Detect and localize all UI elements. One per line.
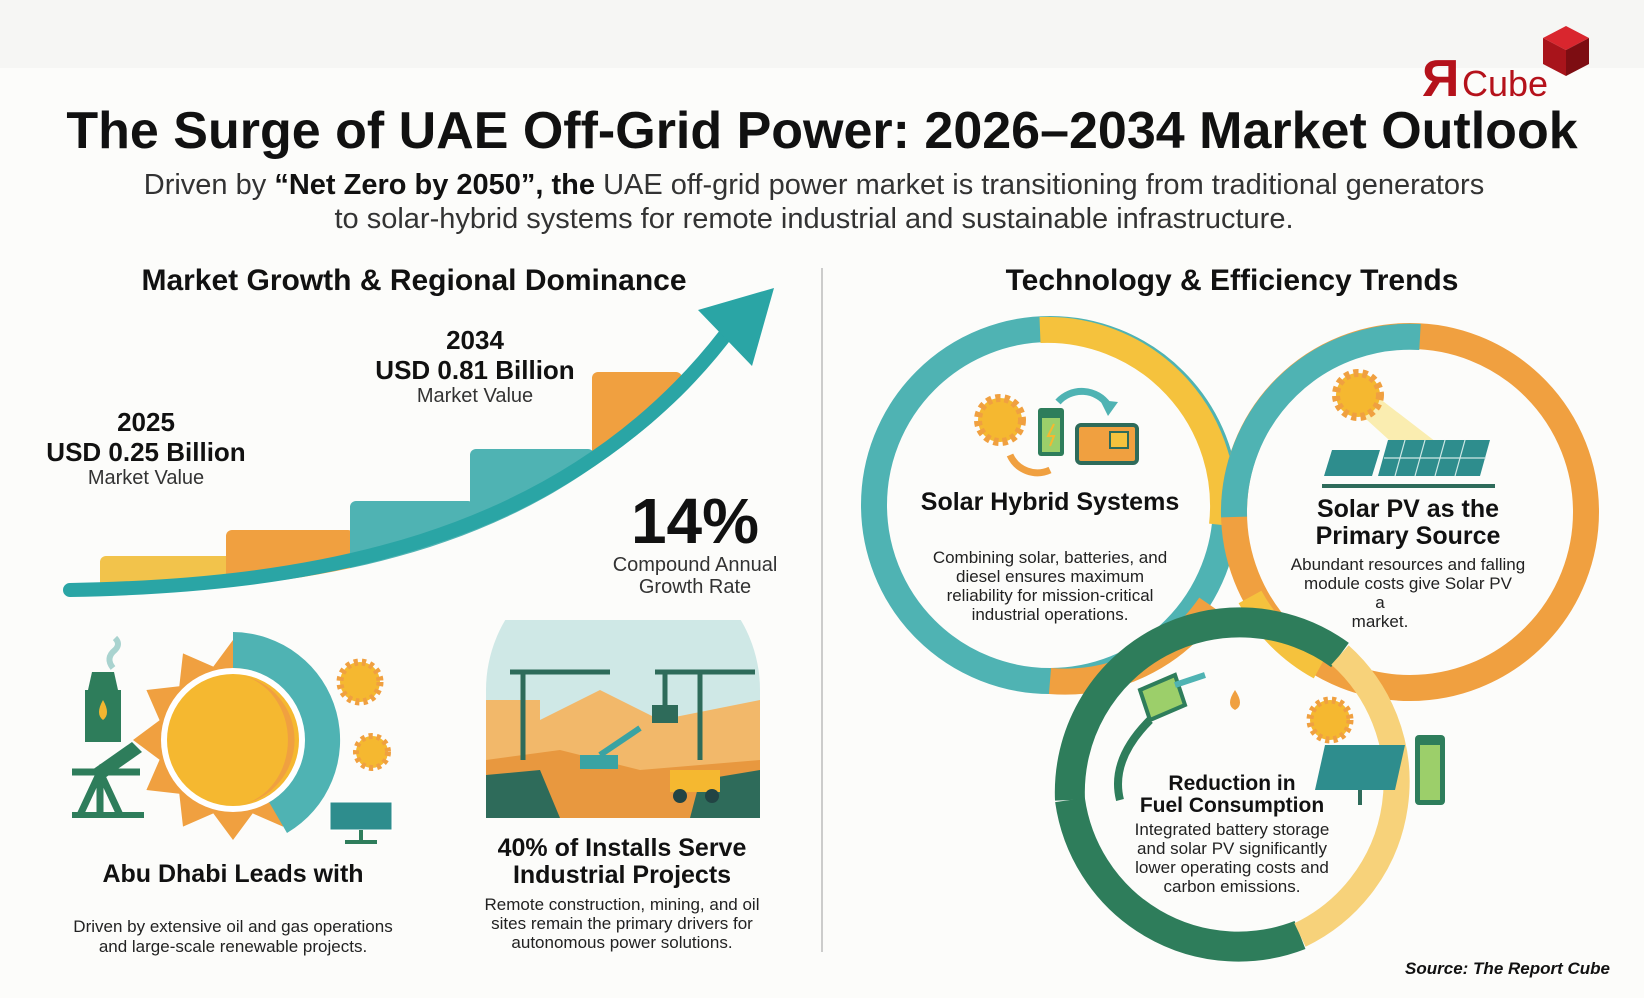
- panel: fuel reduction: Fuel Consumption: [1140, 794, 1324, 817]
- CAGR: Compound Annual: [613, 554, 777, 576]
- text: 40% installs: Remote construction, mining, and oil: [485, 895, 759, 914]
- arrow: [68, 330, 738, 592]
- label 2034: USD 0.81 Billion: [375, 355, 575, 385]
- CAGR: [613, 485, 777, 598]
- rings: [874, 329, 1586, 947]
- label 2025: Market Value: [88, 467, 204, 489]
- title: The Surge of UAE Off-Grid Power: 2026–2034 Market Outlook: [66, 102, 1578, 160]
- panel: solar hybrid: diesel ensures maximum: [956, 567, 1144, 586]
- text: 40% installs: autonomous power solutions.: [511, 933, 733, 952]
- text: Abu Dhabi: and large-scale renewable projects.: [99, 937, 367, 956]
- panel: solar PV: [1291, 373, 1525, 631]
- panel: solar PV: market.: [1352, 612, 1408, 631]
- icon: industrial scene: [486, 620, 760, 820]
- panel: solar hybrid: industrial operations.: [972, 605, 1128, 624]
- panel: fuel reduction: [1118, 675, 1445, 896]
- subtitle: to solar-hybrid systems for remote industrial and sustainable infrastructure.: [334, 203, 1294, 235]
- text: Abu Dhabi: Abu Dhabi Leads with: [102, 860, 364, 888]
- heading: market growth: Market Growth & Regional Dominance: [141, 264, 687, 297]
- text: 40% installs: [485, 834, 759, 952]
- panel: fuel reduction: carbon emissions.: [1163, 877, 1301, 896]
- label 2025: [46, 407, 246, 489]
- logo: Я: [1422, 50, 1459, 108]
- CAGR: 14%: [631, 485, 759, 557]
- panel: fuel reduction: and solar PV significantly: [1137, 839, 1327, 858]
- panel: solar PV: a: [1375, 593, 1385, 612]
- panel: solar PV: Primary Source: [1316, 522, 1500, 550]
- panel: fuel reduction: lower operating costs and: [1135, 858, 1329, 877]
- heading: technology: Technology & Efficiency Trends: [1006, 264, 1458, 297]
- icon: solar panels: [1322, 373, 1495, 486]
- text: 40% installs: Industrial Projects: [513, 861, 731, 889]
- icon: fuel nozzle: [1118, 675, 1240, 800]
- icon: sun solar battery: [1310, 700, 1445, 805]
- logo: [1422, 26, 1589, 108]
- step chart: [68, 288, 774, 610]
- text: Abu Dhabi: Driven by extensive oil and gas operations: [73, 917, 393, 936]
- panel: solar hybrid: [921, 391, 1179, 624]
- panel: solar hybrid: Combining solar, batteries, and: [933, 548, 1167, 567]
- panel: solar PV: Abundant resources and falling: [1291, 555, 1525, 574]
- CAGR: Growth Rate: [639, 576, 751, 598]
- text: 40% installs: sites remain the primary drivers for: [491, 914, 753, 933]
- panel: fuel reduction: Integrated battery storage: [1135, 820, 1329, 839]
- text: Abu Dhabi: [73, 860, 393, 956]
- source: Source: The Report Cube: [1405, 959, 1610, 978]
- panel: solar PV: module costs give Solar PV: [1304, 574, 1513, 593]
- label 2025: USD 0.25 Billion: [46, 437, 246, 467]
- subtitle: [144, 169, 1484, 235]
- panel: fuel reduction: Reduction in: [1168, 772, 1296, 795]
- label 2034: [375, 325, 575, 407]
- panel: solar hybrid: Solar Hybrid Systems: [921, 488, 1179, 516]
- icon: Abu Dhabi sun cluster: [72, 632, 392, 844]
- icon: solar hybrid: [978, 391, 1137, 473]
- label 2025: 2025: [117, 407, 175, 437]
- logo: Cube: [1462, 63, 1548, 104]
- subtitle: Driven by “Net Zero by 2050”, the UAE off-grid power market is transitioning from traditional generators: [144, 169, 1484, 201]
- panel: solar PV: Solar PV as the: [1317, 495, 1499, 523]
- label 2034: 2034: [446, 325, 504, 355]
- text: 40% installs: 40% of Installs Serve: [498, 834, 746, 862]
- panel: solar hybrid: reliability for mission-critical: [947, 586, 1153, 605]
- label 2034: Market Value: [417, 385, 533, 407]
